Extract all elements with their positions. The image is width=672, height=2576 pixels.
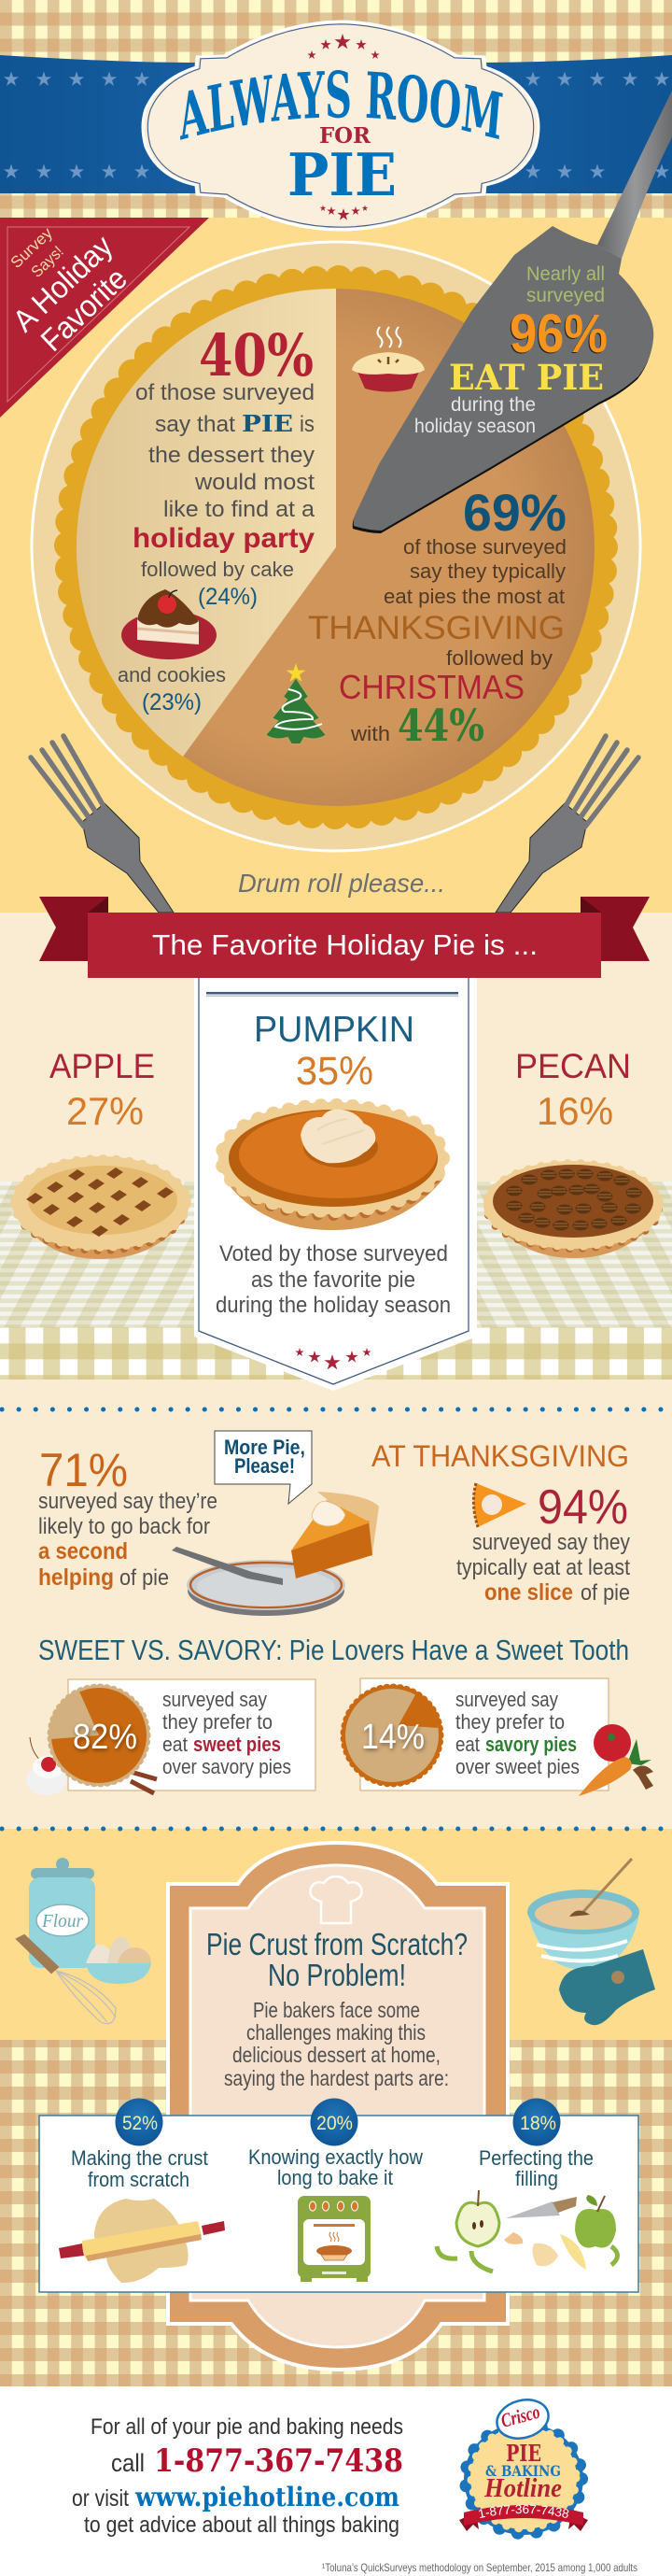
stat: 40% pie at a holiday party: like to find at a (163, 497, 315, 522)
label: making the crust (71, 2146, 208, 2191)
stat: 40% pie at a holiday party: of those surveyed (135, 380, 315, 405)
icon: apple pie (12, 1156, 189, 1259)
stat: 40% pie at a holiday party: would most (194, 470, 315, 495)
icon: steaming pie (352, 327, 425, 392)
text: pie bakers challenges (224, 1998, 449, 2090)
stat: 40% pie at a holiday party: is (300, 412, 315, 437)
hotline badge: Crisco (498, 2400, 542, 2432)
panel: sweet pies: eat (162, 1733, 188, 1756)
badge 20%: 20% (316, 2113, 353, 2134)
pumpkin label: PUMPKIN (254, 1010, 414, 1050)
fork left (31, 736, 174, 913)
footer background (0, 2386, 672, 2576)
stat: 69% thanksgiving and christmas: eat pies the most at (384, 585, 565, 608)
badge 18% (513, 2098, 560, 2146)
icon: cinnamon sticks (131, 1772, 157, 1793)
stat: 96% eat pie: 96% (510, 304, 608, 364)
pumpkin description (216, 1241, 451, 1318)
panel: challenges box (39, 2098, 638, 2292)
text: pie bakers challenges: challenges making this (246, 2020, 426, 2045)
hotline badge: & BAKING (485, 2462, 561, 2480)
stat: 69% thanksgiving and christmas: followed by (446, 646, 553, 670)
icon: pie slice on plate (172, 1492, 379, 1616)
pumpkin description: Voted by those surveyed (219, 1241, 448, 1267)
forks (31, 736, 638, 913)
chart: 82% pie (49, 1686, 148, 1785)
icon: chef hat (310, 1876, 362, 1923)
stat: 40% pie at a holiday party: PIE (242, 410, 293, 437)
stat: 40% pie at a holiday party: (23%) (142, 689, 202, 715)
pie server spatula (353, 91, 672, 533)
panel: sweet pies: they prefer to (162, 1710, 273, 1734)
stat: 94% at thanksgiving: of pie (581, 1580, 630, 1606)
stat: 94% at thanksgiving: AT THANKSGIVING (371, 1439, 629, 1473)
stat: 69% thanksgiving and christmas: 44% (398, 701, 484, 752)
dotted divider one (2, 1407, 672, 1412)
label: perfecting the filling: Perfecting the (479, 2146, 594, 2170)
dotted divider two (2, 1827, 672, 1831)
panel: sweet pies: over savory pies (162, 1755, 291, 1778)
stat: 96% eat pie (414, 263, 608, 437)
label: making the crust: from scratch (88, 2168, 189, 2191)
icon: oven (298, 2196, 371, 2282)
label: perfecting the filling (479, 2146, 594, 2190)
pumpkin percent: 35% (296, 1049, 373, 1094)
pie chart (32, 242, 640, 851)
stat: 69% thanksgiving and christmas: say they typically (410, 559, 566, 583)
label: knowing how long (248, 2145, 423, 2189)
stat: 40% pie at a holiday party: holiday party (133, 523, 315, 554)
stat: 94% at thanksgiving: typically eat at least (456, 1555, 630, 1580)
ribbon banner: The Favorite Holiday Pie is ... (152, 928, 538, 961)
label: knowing how long: long to bake it (277, 2166, 393, 2189)
stat: 40% pie at a holiday party: the dessert they (148, 443, 315, 468)
perspective tablecloth right (477, 1182, 672, 1328)
title plaque (142, 21, 539, 232)
text: pie bakers challenges: saying the hardest parts are: (224, 2066, 449, 2090)
flat gingham cloth (0, 1327, 672, 1380)
pecan column (483, 1047, 663, 1258)
badge 18%: 18% (520, 2113, 556, 2134)
heading: pie crust from scratch: Pie Crust from Scratch? (206, 1927, 468, 1961)
drum roll text: Drum roll please... (238, 869, 445, 898)
stat: 96% eat pie: holiday season (414, 416, 536, 437)
stat: 71% second helping (38, 1444, 217, 1591)
stat: 96% eat pie: surveyed (526, 285, 605, 306)
icon: christmas tree cookie (265, 663, 327, 744)
panel: sweet pies: surveyed say (162, 1688, 267, 1711)
heading: pie crust from scratch (206, 1927, 468, 1992)
stat: 96% eat pie: Nearly all (526, 263, 605, 285)
footer contact text: or visit (72, 2485, 129, 2512)
fork right (496, 736, 638, 913)
stat: 94% at thanksgiving: surveyed say they (472, 1530, 630, 1555)
icon: pumpkin pie (218, 1102, 446, 1230)
apple column (12, 1047, 189, 1259)
speech bubble: Please! (234, 1454, 295, 1478)
footer contact text: to get advice about all things baking (84, 2512, 399, 2538)
icon: pecan pie (483, 1161, 663, 1258)
panel: savory pies: they prefer to (455, 1710, 565, 1734)
panel: sweet pies (26, 1679, 315, 1795)
chart: 14% pie: 14% (361, 1718, 425, 1757)
background: yellow baking section (0, 1829, 672, 2040)
icon: flour jar, whisk and eggs (17, 1858, 151, 2024)
survey says corner banner: Says! (28, 243, 67, 281)
background: top gingham (0, 0, 672, 219)
footer contact text (72, 2414, 403, 2538)
stat: 71% second helping: a second (38, 1538, 128, 1564)
panel: pie crust plaque (168, 1843, 508, 2370)
stat: 71% second helping: helping (38, 1564, 114, 1591)
pecan column: 16% (537, 1089, 613, 1133)
text: pie bakers challenges: Pie bakers face some (253, 1998, 420, 2022)
icon: small pumpkin slice (473, 1483, 526, 1527)
panel: sweet pies: sweet pies (193, 1733, 281, 1756)
stat: 40% pie at a holiday party: followed by cake (141, 558, 294, 581)
stat: 71% second helping: likely to go back for (38, 1514, 210, 1539)
survey says corner banner: A Holiday (6, 228, 119, 338)
icon: dough and rolling pin (59, 2199, 225, 2283)
panel: savory pies: eat (455, 1733, 480, 1756)
icon: mixing bowl and oven mitt (527, 1859, 655, 2025)
pumpkin description: during the holiday season (216, 1293, 451, 1318)
label: making the crust: Making the crust (71, 2146, 208, 2170)
survey says corner banner: Favorite (34, 261, 133, 358)
perspective tablecloth left (0, 1182, 194, 1328)
stat: 94% at thanksgiving: one slice (484, 1579, 573, 1606)
icon: cherry whipped cream (26, 1737, 67, 1795)
panel: savory pies: savory pies (485, 1733, 577, 1756)
ribbon banner (39, 897, 650, 978)
apple column: APPLE (49, 1047, 155, 1085)
title: for: FOR (319, 123, 371, 149)
label: perfecting the filling: filling (515, 2167, 558, 2190)
footer contact text: For all of your pie and baking needs (91, 2414, 403, 2440)
stat: 40% pie at a holiday party: say that (155, 412, 235, 437)
speech bubble (215, 1431, 312, 1504)
stat: 69% thanksgiving and christmas (308, 483, 567, 752)
badge 52% (116, 2098, 162, 2146)
survey says corner banner (0, 218, 209, 418)
chart: 82% pie: 82% (73, 1718, 137, 1757)
panel: savory pies: over sweet pies (455, 1755, 580, 1778)
apple column: 27% (66, 1089, 144, 1133)
panel: savory pies (343, 1678, 653, 1796)
stat: 40% pie at a holiday party: (24%) (198, 584, 258, 610)
stat: 96% eat pie: during the (451, 394, 536, 416)
label: knowing how long: Knowing exactly how (248, 2145, 423, 2169)
background: yellow survey section (0, 218, 672, 913)
stat: 40% pie at a holiday party: and cookies (118, 663, 226, 686)
background: cream section (0, 913, 672, 1830)
icon: vegetables (579, 1724, 653, 1796)
footer contact text: 1-877-367-7438 (154, 2442, 403, 2480)
background: bottom gingham (0, 2040, 672, 2386)
panel: pumpkin pennant (194, 978, 477, 1391)
stat: 40% pie at a holiday party (118, 321, 315, 715)
heading: pie crust from scratch: No Problem! (268, 1958, 406, 1992)
icon: apples and peels (437, 2190, 618, 2272)
panel: savory pies: surveyed say (455, 1688, 558, 1711)
stat: 94% at thanksgiving: 94% (538, 1480, 628, 1535)
stat: 69% thanksgiving and christmas: with (350, 722, 390, 745)
title: pie: PIE (287, 140, 397, 209)
stat: 69% thanksgiving and christmas: CHRISTMAS (339, 668, 525, 706)
stat: 40% pie at a holiday party: 40% (199, 321, 314, 389)
survey says corner banner: Survey (7, 224, 56, 272)
hotline badge: PIE (506, 2440, 541, 2467)
blue star banner (0, 55, 672, 193)
footer contact text: www.piehotline.com (134, 2482, 399, 2512)
cream section cover over fork ends (0, 913, 672, 941)
stat: 94% at thanksgiving (371, 1439, 630, 1606)
speech bubble: More Pie, (224, 1436, 305, 1459)
chart: 14% pie (343, 1686, 441, 1785)
icon: cake slice (121, 589, 217, 659)
stat: 71% second helping: 71% (39, 1444, 128, 1496)
stat: 69% thanksgiving and christmas: THANKSGIVING (308, 610, 565, 646)
pumpkin description: as the favorite pie (251, 1267, 415, 1293)
hotline badge: Hotline (483, 2474, 562, 2503)
hotline badge (459, 2399, 588, 2540)
footer contact text: call (111, 2449, 145, 2477)
hotline badge: 1-877-367-7438 (479, 2505, 569, 2518)
stat: 69% thanksgiving and christmas: 69% (463, 483, 567, 542)
stat: 71% second helping: of pie (119, 1565, 169, 1591)
badge 52%: 52% (122, 2113, 158, 2134)
stat: 69% thanksgiving and christmas: of those surveyed (403, 535, 567, 559)
badge 20% (310, 2098, 358, 2146)
pecan column: PECAN (515, 1047, 631, 1085)
stat: 96% eat pie: EAT PIE (449, 357, 604, 398)
stat: 71% second helping: surveyed say they’re (38, 1489, 217, 1514)
text: pie bakers challenges: delicious dessert at home, (232, 2043, 441, 2067)
icon: flour jar, whisk and eggs: Flour (41, 1911, 83, 1932)
title: always room: ALWAYS ROOM (180, 70, 503, 140)
